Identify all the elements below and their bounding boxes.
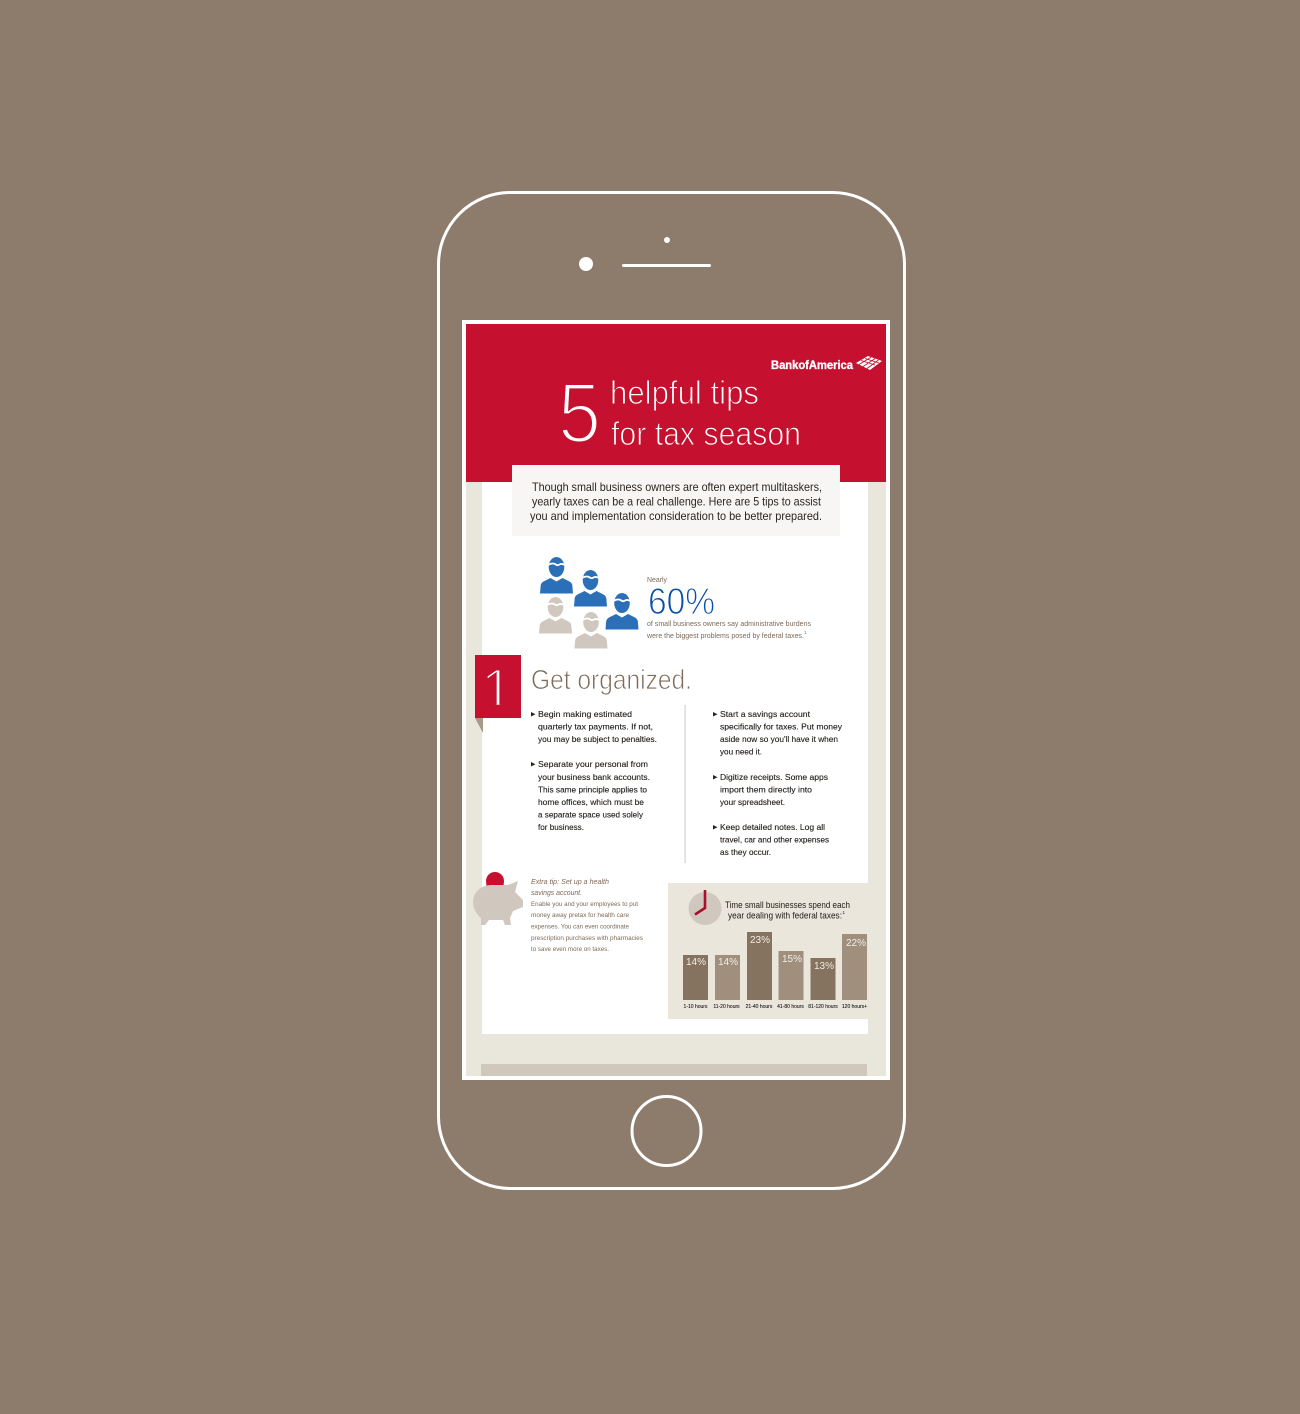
extra tip text: savings account. bbox=[531, 890, 582, 897]
statistic: 60 percent: 60% bbox=[648, 581, 715, 622]
title: helpful tips bbox=[610, 374, 759, 411]
title bbox=[558, 366, 801, 461]
bar chart: 13% bbox=[814, 961, 834, 972]
bar chart: 120 hours+ bbox=[842, 1004, 867, 1010]
left tips column: for business. bbox=[538, 822, 584, 832]
right tips column: Keep detailed notes. Log all bbox=[720, 822, 825, 832]
right tips column: specifically for taxes. Put money bbox=[720, 722, 843, 732]
chart title: Time small businesses spend each bbox=[725, 900, 850, 910]
left tips column: quarterly tax payments. If not, bbox=[538, 722, 653, 732]
title: 5 bbox=[558, 366, 601, 461]
statistic: 60 percent: were the biggest problems posed by federal taxes. bbox=[646, 633, 804, 640]
heading: Get organized: Get organized. bbox=[531, 664, 692, 695]
Bank of America logo: BankofAmerica bbox=[771, 359, 854, 372]
right tips column: as they occur. bbox=[720, 847, 771, 857]
chart title bbox=[725, 900, 850, 920]
intro text box: yearly taxes can be a real challenge. Here are 5 tips to assist bbox=[532, 494, 822, 508]
number badge 1: 1 bbox=[481, 658, 513, 722]
right tips column bbox=[713, 709, 843, 857]
left tips column bbox=[531, 709, 657, 832]
chart title: 1 bbox=[842, 910, 846, 915]
statistic: 60 percent: of small business owners say administrative burdens bbox=[647, 621, 812, 628]
bar chart: 41-80 hours bbox=[777, 1004, 804, 1010]
intro text box: Though small business owners are often expert multitaskers, bbox=[532, 480, 822, 494]
title: for tax season bbox=[611, 415, 801, 452]
left tips column: you may be subject to penalties. bbox=[538, 734, 657, 744]
bar chart: 22% bbox=[846, 938, 866, 949]
extra tip text: prescription purchases with pharmacies bbox=[531, 935, 643, 942]
intro text box: you and implementation consideration to be better prepared. bbox=[530, 509, 822, 523]
icon: group of people bbox=[539, 557, 638, 648]
left tips column: home offices, which must be bbox=[538, 797, 644, 807]
left tips column: a separate space used solely bbox=[538, 810, 644, 820]
left tips column: Separate your personal from bbox=[538, 759, 648, 769]
statistic: 60 percent bbox=[646, 577, 812, 640]
left tips column: Begin making estimated bbox=[538, 709, 632, 719]
extra tip text: money away pretax for health care bbox=[531, 912, 629, 919]
phone screen bbox=[462, 320, 890, 1080]
extra tip text: expenses. You can even coordinate bbox=[531, 924, 629, 930]
right tips column: import them directly into bbox=[720, 784, 812, 794]
statistic: 60 percent: Nearly bbox=[647, 577, 667, 584]
bar chart: 11-20 hours bbox=[713, 1004, 740, 1010]
number badge 1 bbox=[475, 655, 521, 733]
right tips column: travel, car and other expenses bbox=[720, 834, 829, 844]
left tips column: This same principle applies to bbox=[538, 784, 647, 794]
bar chart: 1-10 hours bbox=[684, 1004, 708, 1010]
bar chart: 81-120 hours bbox=[808, 1004, 838, 1010]
phone outline bbox=[438, 192, 904, 1188]
right tips column: you need it. bbox=[720, 746, 762, 756]
infographic canvas bbox=[437, 191, 906, 1190]
right tips column: aside now so you'll have it when bbox=[720, 734, 838, 744]
icon: piggy bank bbox=[473, 872, 523, 925]
extra tip text: to save even more on taxes. bbox=[531, 946, 609, 953]
chart title: year dealing with federal taxes: bbox=[728, 910, 842, 920]
right tips column: your spreadsheet. bbox=[720, 797, 785, 807]
panel: time spent on federal taxes bbox=[668, 883, 868, 1019]
right tips column: Digitize receipts. Some apps bbox=[720, 772, 828, 782]
red header bbox=[466, 324, 886, 482]
extra tip text bbox=[531, 879, 643, 953]
statistic: 60 percent: 1 bbox=[804, 630, 807, 635]
Bank of America logo bbox=[771, 356, 882, 372]
right tips column: Start a savings account bbox=[720, 709, 811, 719]
left tips column: your business bank accounts. bbox=[538, 772, 650, 782]
bar chart: 14% bbox=[718, 957, 738, 968]
extra tip text: Enable you and your employees to put bbox=[531, 901, 638, 908]
bar chart: 14% bbox=[686, 957, 706, 968]
bar chart bbox=[683, 932, 867, 1010]
intro text box bbox=[512, 465, 840, 536]
extra tip text: Extra tip: Set up a health bbox=[531, 879, 609, 886]
bar chart: 21-40 hours bbox=[746, 1004, 773, 1010]
icon: clock bbox=[688, 890, 722, 925]
bar chart: 23% bbox=[750, 935, 770, 946]
bar chart: 15% bbox=[782, 954, 802, 965]
